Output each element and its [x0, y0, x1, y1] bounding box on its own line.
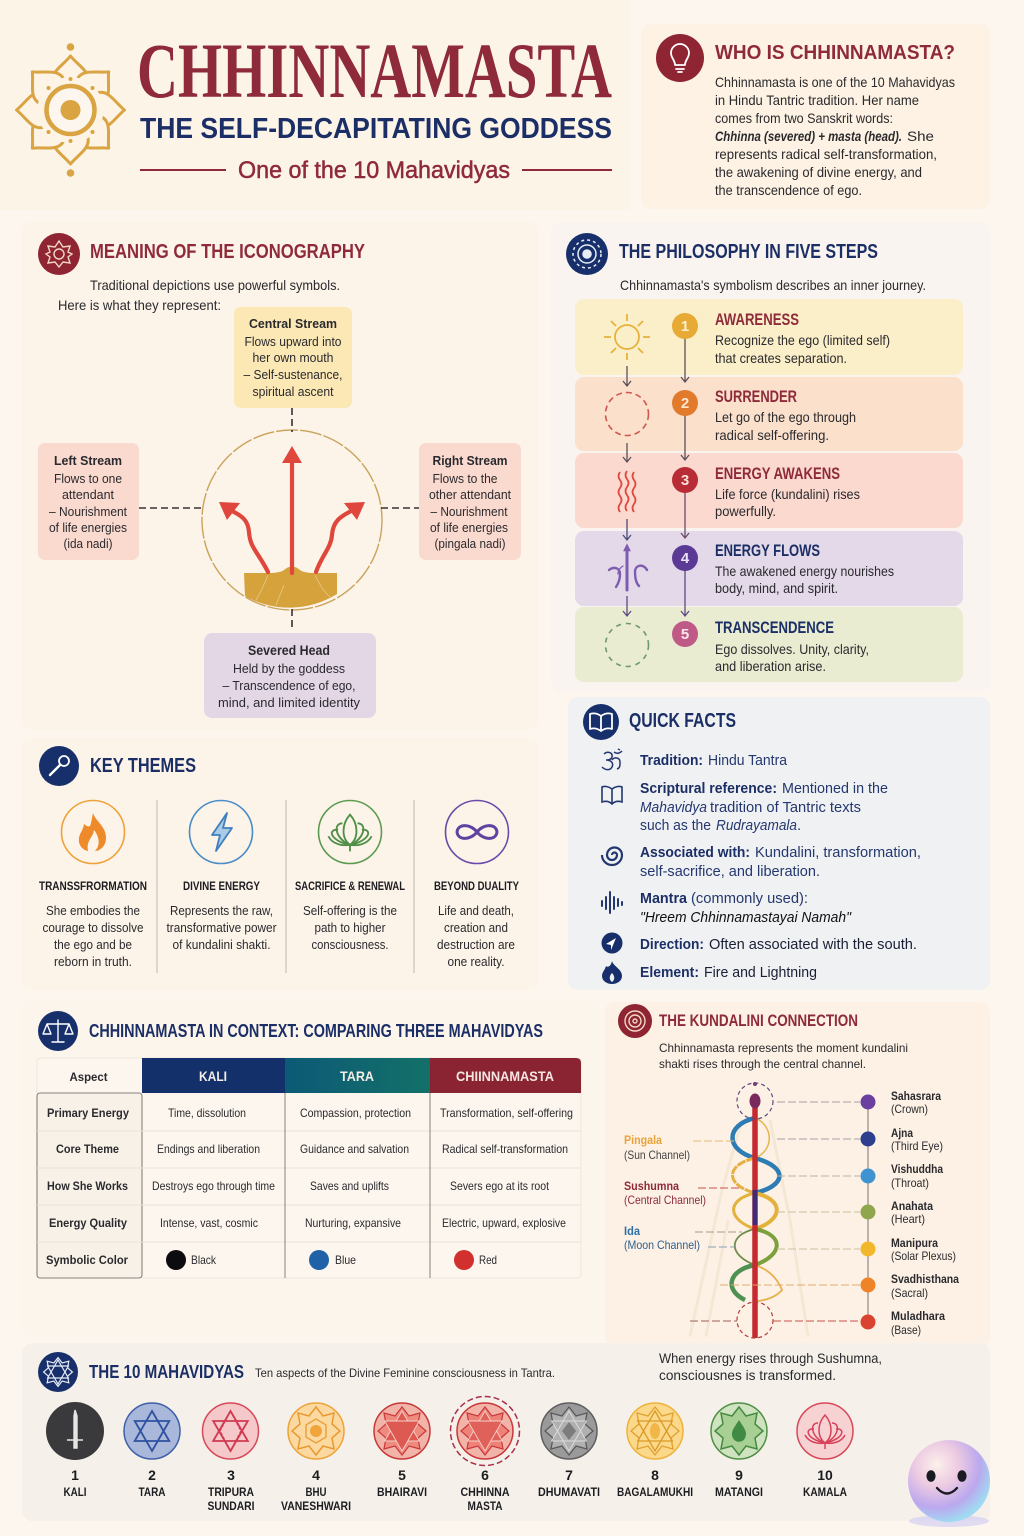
- heading: THE KUNDALINI CONNECTION: [659, 1012, 858, 1030]
- step 3: [575, 453, 963, 528]
- step 4: ENERGY FLOWS: [715, 541, 820, 560]
- icon: spiral badge: [618, 1004, 652, 1038]
- fact: mantra: "Hreem Chhinnamastayai Namah": [640, 909, 852, 926]
- chakra column: (Third Eye): [891, 1139, 943, 1153]
- goddess 4 bhuvaneshwari: VANESHWARI: [281, 1499, 351, 1513]
- heading: KEY THEMES: [90, 755, 196, 777]
- icon: wand badge: [39, 746, 79, 786]
- callout: right stream: [419, 443, 521, 560]
- goddess 6 chhinnamasta: CHHINNA: [460, 1485, 510, 1499]
- step 3: ENERGY AWAKENS: [715, 464, 840, 483]
- number badges: 3: [681, 472, 689, 489]
- title: CHHINNAMASTA: [137, 27, 612, 114]
- chakra column: (Sacral): [891, 1286, 928, 1300]
- goddess 5 bhairavi: 5: [398, 1467, 406, 1483]
- fact: scriptural reference: Rudrayamala: [716, 817, 797, 834]
- panel: the 10 mahavidyas: [22, 1343, 990, 1521]
- comparison table: Black: [191, 1253, 217, 1267]
- subtitle: THE SELF-DECAPITATING GODDESS: [140, 113, 612, 145]
- callout: severed head: – Transcendence of ego,: [222, 678, 356, 693]
- comparison table: Saves and uplifts: [310, 1179, 389, 1193]
- goddess 6 chhinnamasta: [450, 1396, 520, 1513]
- goddess 10 kamala: KAMALA: [803, 1485, 847, 1499]
- theme: sacrifice and renewal: consciousness.: [312, 937, 388, 952]
- comparison table: Guidance and salvation: [300, 1142, 409, 1156]
- theme: sacrifice and renewal: Self-offering is the: [303, 903, 397, 918]
- goddess 9 matangi: 9: [735, 1467, 743, 1483]
- theme: divine energy: [166, 800, 277, 952]
- heading: CHHINNAMASTA IN CONTEXT: COMPARING THREE MAHAVIDYAS: [89, 1021, 543, 1041]
- header: [0, 0, 630, 210]
- step 4: The awakened energy nourishes: [715, 563, 894, 579]
- text block: represents radical self-transformation,: [715, 146, 937, 162]
- comparison table: TARA: [340, 1068, 374, 1084]
- step 3: powerfully.: [715, 503, 776, 519]
- callout: central stream: her own mouth: [252, 350, 334, 365]
- goddess 2 tara: 2: [148, 1467, 156, 1483]
- fact: scriptural reference: Mahavidya: [640, 799, 707, 816]
- step 2: [575, 377, 963, 451]
- chakra column: [860, 1089, 959, 1337]
- diagram: severed neck with three blood streams: [202, 430, 382, 610]
- heading: THE 10 MAHAVIDYAS: [89, 1362, 244, 1382]
- comparison table: Symbolic Color: [46, 1253, 128, 1267]
- number badges: [672, 313, 698, 647]
- step 5: and liberation arise.: [715, 658, 826, 674]
- nadi labels: Pingala: [624, 1133, 662, 1147]
- icon: scales badge: [38, 1011, 78, 1051]
- callout: right stream: Right Stream: [432, 453, 508, 468]
- nadi labels: [624, 1133, 706, 1252]
- text block: the awakening of divine energy, and: [715, 164, 922, 180]
- fact: scriptural reference: .: [797, 817, 801, 834]
- chakra column: Manipura: [891, 1236, 938, 1250]
- callout: right stream: other attendant: [429, 487, 511, 502]
- goddess 6 chhinnamasta: 6: [481, 1467, 489, 1483]
- subheading: Ten aspects of the Divine Feminine consciousness in Tantra.: [255, 1366, 555, 1380]
- goddess 5 bhairavi: BHAIRAVI: [377, 1485, 427, 1499]
- step arrows: [623, 338, 689, 616]
- callout: central stream: [234, 307, 352, 408]
- goddess 4 bhuvaneshwari: [281, 1403, 351, 1513]
- icon: mandala badge: [38, 233, 80, 275]
- comparison table: Blue: [335, 1253, 356, 1267]
- fact: associated with: [602, 844, 921, 880]
- heading: WHO IS CHHINNAMASTA?: [715, 42, 955, 64]
- comparison table: Destroys ego through time: [152, 1179, 275, 1193]
- comparison table: KALI: [199, 1068, 227, 1084]
- goddess 10 kamala: 10: [817, 1467, 833, 1483]
- step 5: [575, 607, 963, 682]
- goddess 8 bagalamukhi: 8: [651, 1467, 659, 1483]
- comparison table: Compassion, protection: [300, 1106, 411, 1120]
- comparison table: Severs ego at its root: [450, 1179, 550, 1193]
- goddess 3 tripura sundari: TRIPURA: [208, 1485, 254, 1499]
- theme: transformation: the ego and be: [54, 937, 132, 952]
- step 2: Let go of the ego through: [715, 409, 856, 425]
- theme: beyond duality: [434, 800, 519, 969]
- theme: beyond duality: Life and death,: [438, 903, 514, 918]
- text block: comes from two Sanskrit words:: [715, 110, 893, 126]
- chakra column: Muladhara: [891, 1309, 945, 1323]
- step 3: Life force (kundalini) rises: [715, 486, 860, 502]
- goddess 3 tripura sundari: [202, 1403, 258, 1513]
- callout: severed head: mind, and limited identity: [218, 695, 360, 710]
- text block: Chhinnamasta is one of the 10 Mahavidyas: [715, 74, 955, 90]
- fact: associated with: Associated with:: [640, 844, 750, 861]
- comparison table: Radical self-transformation: [442, 1142, 568, 1156]
- panel: philosophy in five steps: [551, 222, 990, 692]
- fact: mantra: Mantra: [640, 890, 688, 907]
- intro text: Chhinnamasta's symbolism describes an inner journey.: [620, 277, 926, 293]
- intro text: [659, 1041, 908, 1071]
- comparison table: Energy Quality: [49, 1216, 127, 1230]
- intro text: [58, 277, 340, 313]
- theme: sacrifice and renewal: SACRIFICE & RENEWAL: [295, 879, 405, 893]
- chakra column: (Base): [891, 1323, 921, 1337]
- fact: mantra: [602, 890, 852, 926]
- fact: scriptural reference: Scriptural reference:: [640, 780, 777, 797]
- panel: meaning of the iconography: [22, 222, 538, 730]
- intro text: shakti rises through the central channel.: [659, 1057, 866, 1071]
- comparison table: CHIINNAMASTA: [456, 1068, 554, 1084]
- goddess 9 matangi: [711, 1403, 767, 1499]
- heading: QUICK FACTS: [629, 710, 736, 732]
- chakra column: Sahasrara: [891, 1089, 941, 1103]
- chakra column: Svadhisthana: [891, 1272, 959, 1286]
- fact: scriptural reference: Mentioned in the: [782, 780, 888, 797]
- chakra column: (Heart): [891, 1212, 925, 1226]
- comparison table: Red: [479, 1253, 497, 1267]
- icon: light bulb: [656, 34, 704, 82]
- callout: left stream: [38, 443, 139, 560]
- callout: severed head: [204, 633, 376, 718]
- kundalini closing note: When energy rises through Sushumna,: [659, 1350, 882, 1366]
- goddess 1 kali: [46, 1402, 104, 1499]
- step 4: [575, 531, 963, 606]
- step 5: Ego dissolves. Unity, clarity,: [715, 641, 869, 657]
- step 5: TRANSCENDENCE: [715, 618, 834, 637]
- callout: central stream: – Self-sustenance,: [244, 367, 342, 382]
- chakra leaders: [690, 1102, 860, 1321]
- nadi labels: Sushumna: [624, 1179, 679, 1193]
- step 1: Recognize the ego (limited self): [715, 332, 890, 348]
- icon: sun badge: [566, 233, 608, 275]
- theme: sacrifice and renewal: path to higher: [314, 920, 386, 935]
- nadi labels: (Central Channel): [624, 1193, 706, 1207]
- tagline: One of the 10 Mahavidyas: [238, 157, 510, 184]
- icon: yantra badge: [38, 1352, 78, 1392]
- intro text: Traditional depictions use powerful symbols.: [90, 277, 340, 293]
- fact: direction: Direction:: [640, 936, 704, 953]
- fact: associated with: Kundalini, transformation,: [755, 844, 921, 861]
- goddess 7 dhumavati: DHUMAVATI: [538, 1485, 600, 1499]
- step 2: radical self-offering.: [715, 427, 829, 443]
- fact: scriptural reference: tradition of Tantric texts: [710, 799, 861, 816]
- icon: dissolving circle: [606, 624, 648, 666]
- comparison table: Time, dissolution: [168, 1106, 246, 1120]
- callout: central stream: Flows upward into: [244, 334, 342, 349]
- chakra column: (Throat): [891, 1176, 929, 1190]
- text block: Chhinna (severed) + masta (head).: [715, 128, 902, 144]
- intro text: Here is what they represent:: [58, 297, 221, 313]
- theme: beyond duality: one reality.: [448, 954, 504, 969]
- callout: right stream: – Nourishment: [430, 504, 508, 519]
- nadi labels: (Moon Channel): [624, 1238, 700, 1252]
- chakra column: (Solar Plexus): [891, 1249, 956, 1263]
- callout: left stream: of life energies: [49, 520, 127, 535]
- theme: transformation: She embodies the: [46, 903, 140, 918]
- fact: scriptural reference: such as the: [640, 817, 711, 834]
- intro text: Chhinnamasta represents the moment kundalini: [659, 1041, 908, 1055]
- step 2: SURRENDER: [715, 387, 797, 406]
- comparison table: Nurturing, expansive: [305, 1216, 401, 1230]
- goddess 5 bhairavi: [374, 1403, 430, 1499]
- mascot: iridescent smiling orb: [908, 1440, 990, 1527]
- chakra column: (Crown): [891, 1102, 928, 1116]
- fact: tradition: [602, 749, 788, 770]
- theme: beyond duality: creation and: [444, 920, 508, 935]
- nadi labels: (Sun Channel): [624, 1148, 690, 1162]
- comparison table: Aspect: [70, 1070, 108, 1084]
- callout: central stream: Central Stream: [249, 316, 337, 331]
- spine and nadi diagram: [732, 1082, 782, 1338]
- theme: transformation: courage to dissolve: [42, 920, 144, 935]
- theme: transformation: TRANSSFRORMATION: [39, 879, 147, 893]
- number badges: 2: [681, 395, 689, 412]
- callout: left stream: Left Stream: [54, 453, 122, 468]
- goddess 7 dhumavati: 7: [565, 1467, 573, 1483]
- panel: key themes: [22, 738, 538, 990]
- callout: left stream: – Nourishment: [49, 504, 127, 519]
- goddess 4 bhuvaneshwari: 4: [312, 1467, 320, 1483]
- callout: left stream: (ida nadi): [64, 536, 112, 551]
- goddess 2 tara: TARA: [138, 1485, 166, 1499]
- connector lines: [139, 408, 419, 630]
- text block: in Hindu Tantric tradition. Her name: [715, 92, 919, 108]
- chakra column: Anahata: [891, 1199, 933, 1213]
- theme: beyond duality: destruction are: [437, 937, 515, 952]
- callout: right stream: of life energies: [430, 520, 508, 535]
- dividers: [157, 800, 414, 973]
- text block: She: [907, 129, 934, 144]
- icon: flowing channels: [609, 546, 647, 590]
- step 1: [575, 299, 963, 375]
- goddess 9 matangi: MATANGI: [715, 1485, 763, 1499]
- comparison table: [37, 1058, 581, 1278]
- chakra column: Ajna: [891, 1126, 913, 1140]
- fact: tradition: Hindu Tantra: [708, 752, 788, 769]
- goddess 3 tripura sundari: SUNDARI: [208, 1499, 254, 1513]
- heading: THE PHILOSOPHY IN FIVE STEPS: [619, 241, 878, 263]
- callout: severed head: Held by the goddess: [233, 661, 345, 676]
- comparison table: Electric, upward, explosive: [442, 1216, 566, 1230]
- fact: element: Element:: [640, 964, 699, 981]
- goddess 6 chhinnamasta: MASTA: [468, 1499, 503, 1513]
- step 1: that creates separation.: [715, 350, 847, 366]
- fact: tradition: Tradition:: [640, 752, 703, 769]
- fact: element: [602, 961, 817, 984]
- number badges: 4: [681, 550, 690, 567]
- icon: dashed ego circle: [606, 392, 648, 436]
- icon: sun: [604, 314, 650, 360]
- fact: associated with: self-sacrifice, and liberation.: [640, 863, 820, 880]
- goddess 4 bhuvaneshwari: BHU: [306, 1485, 326, 1499]
- callout: central stream: spiritual ascent: [252, 384, 334, 399]
- fact: direction: Often associated with the south.: [709, 936, 917, 953]
- text block: the transcendence of ego.: [715, 182, 862, 198]
- goddess 8 bagalamukhi: [617, 1403, 693, 1499]
- comparison table: Endings and liberation: [157, 1142, 260, 1156]
- callout: right stream: Flows to the: [432, 471, 498, 486]
- comparison table: Intense, vast, cosmic: [160, 1216, 258, 1230]
- theme: beyond duality: BEYOND DUALITY: [434, 879, 519, 893]
- faint body silhouette: [690, 1120, 808, 1336]
- panel: comparison: [22, 1000, 600, 1335]
- icon: rising waves: [618, 471, 636, 512]
- theme: divine energy: Represents the raw,: [170, 903, 273, 918]
- kundalini closing note: [659, 1350, 882, 1383]
- goddess 7 dhumavati: [538, 1403, 600, 1499]
- fact: scriptural reference: [602, 780, 888, 834]
- goddess 8 bagalamukhi: BAGALAMUKHI: [617, 1485, 693, 1499]
- number badges: 1: [681, 318, 689, 335]
- icon: book badge: [583, 704, 619, 740]
- panel: kundalini connection: [605, 1002, 990, 1347]
- theme: transformation: reborn in truth.: [54, 954, 132, 969]
- step 1: AWARENESS: [715, 310, 799, 329]
- goddess 2 tara: [124, 1403, 180, 1499]
- icon: gold lotus mandala: [16, 43, 124, 177]
- theme: divine energy: of kundalini shakti.: [172, 937, 270, 952]
- heading: MEANING OF THE ICONOGRAPHY: [90, 241, 366, 263]
- callout: right stream: (pingala nadi): [434, 536, 506, 551]
- fact: direction: [602, 932, 917, 954]
- theme: transformation: [39, 800, 147, 969]
- comparison table: Core Theme: [56, 1142, 119, 1156]
- goddess 1 kali: 1: [71, 1467, 79, 1483]
- callout: left stream: attendant: [62, 487, 114, 502]
- text block: [715, 74, 955, 198]
- panel: who is chhinnamasta: [641, 24, 990, 209]
- goddess 3 tripura sundari: 3: [227, 1467, 235, 1483]
- goddess 10 kamala: [797, 1403, 853, 1499]
- callout: left stream: Flows to one: [54, 471, 122, 486]
- fact: mantra: (commonly used):: [691, 890, 808, 907]
- goddess 1 kali: KALI: [64, 1485, 86, 1499]
- callout: severed head: Severed Head: [248, 643, 330, 658]
- comparison table: Primary Energy: [47, 1106, 129, 1120]
- nadi labels: Ida: [624, 1224, 640, 1238]
- comparison table: How She Works: [47, 1179, 128, 1193]
- kundalini closing note: consciousnes is transformed.: [659, 1367, 836, 1383]
- comparison table: Transformation, self-offering: [440, 1106, 573, 1120]
- fact: element: Fire and Lightning: [704, 964, 817, 981]
- theme: divine energy: DIVINE ENERGY: [183, 879, 260, 893]
- chakra column: Vishuddha: [891, 1162, 943, 1176]
- theme: sacrifice and renewal: [295, 800, 405, 952]
- panel: quick facts: [568, 697, 990, 990]
- number badges: 5: [681, 626, 689, 643]
- step 4: body, mind, and spirit.: [715, 580, 838, 596]
- theme: divine energy: transformative power: [166, 920, 277, 935]
